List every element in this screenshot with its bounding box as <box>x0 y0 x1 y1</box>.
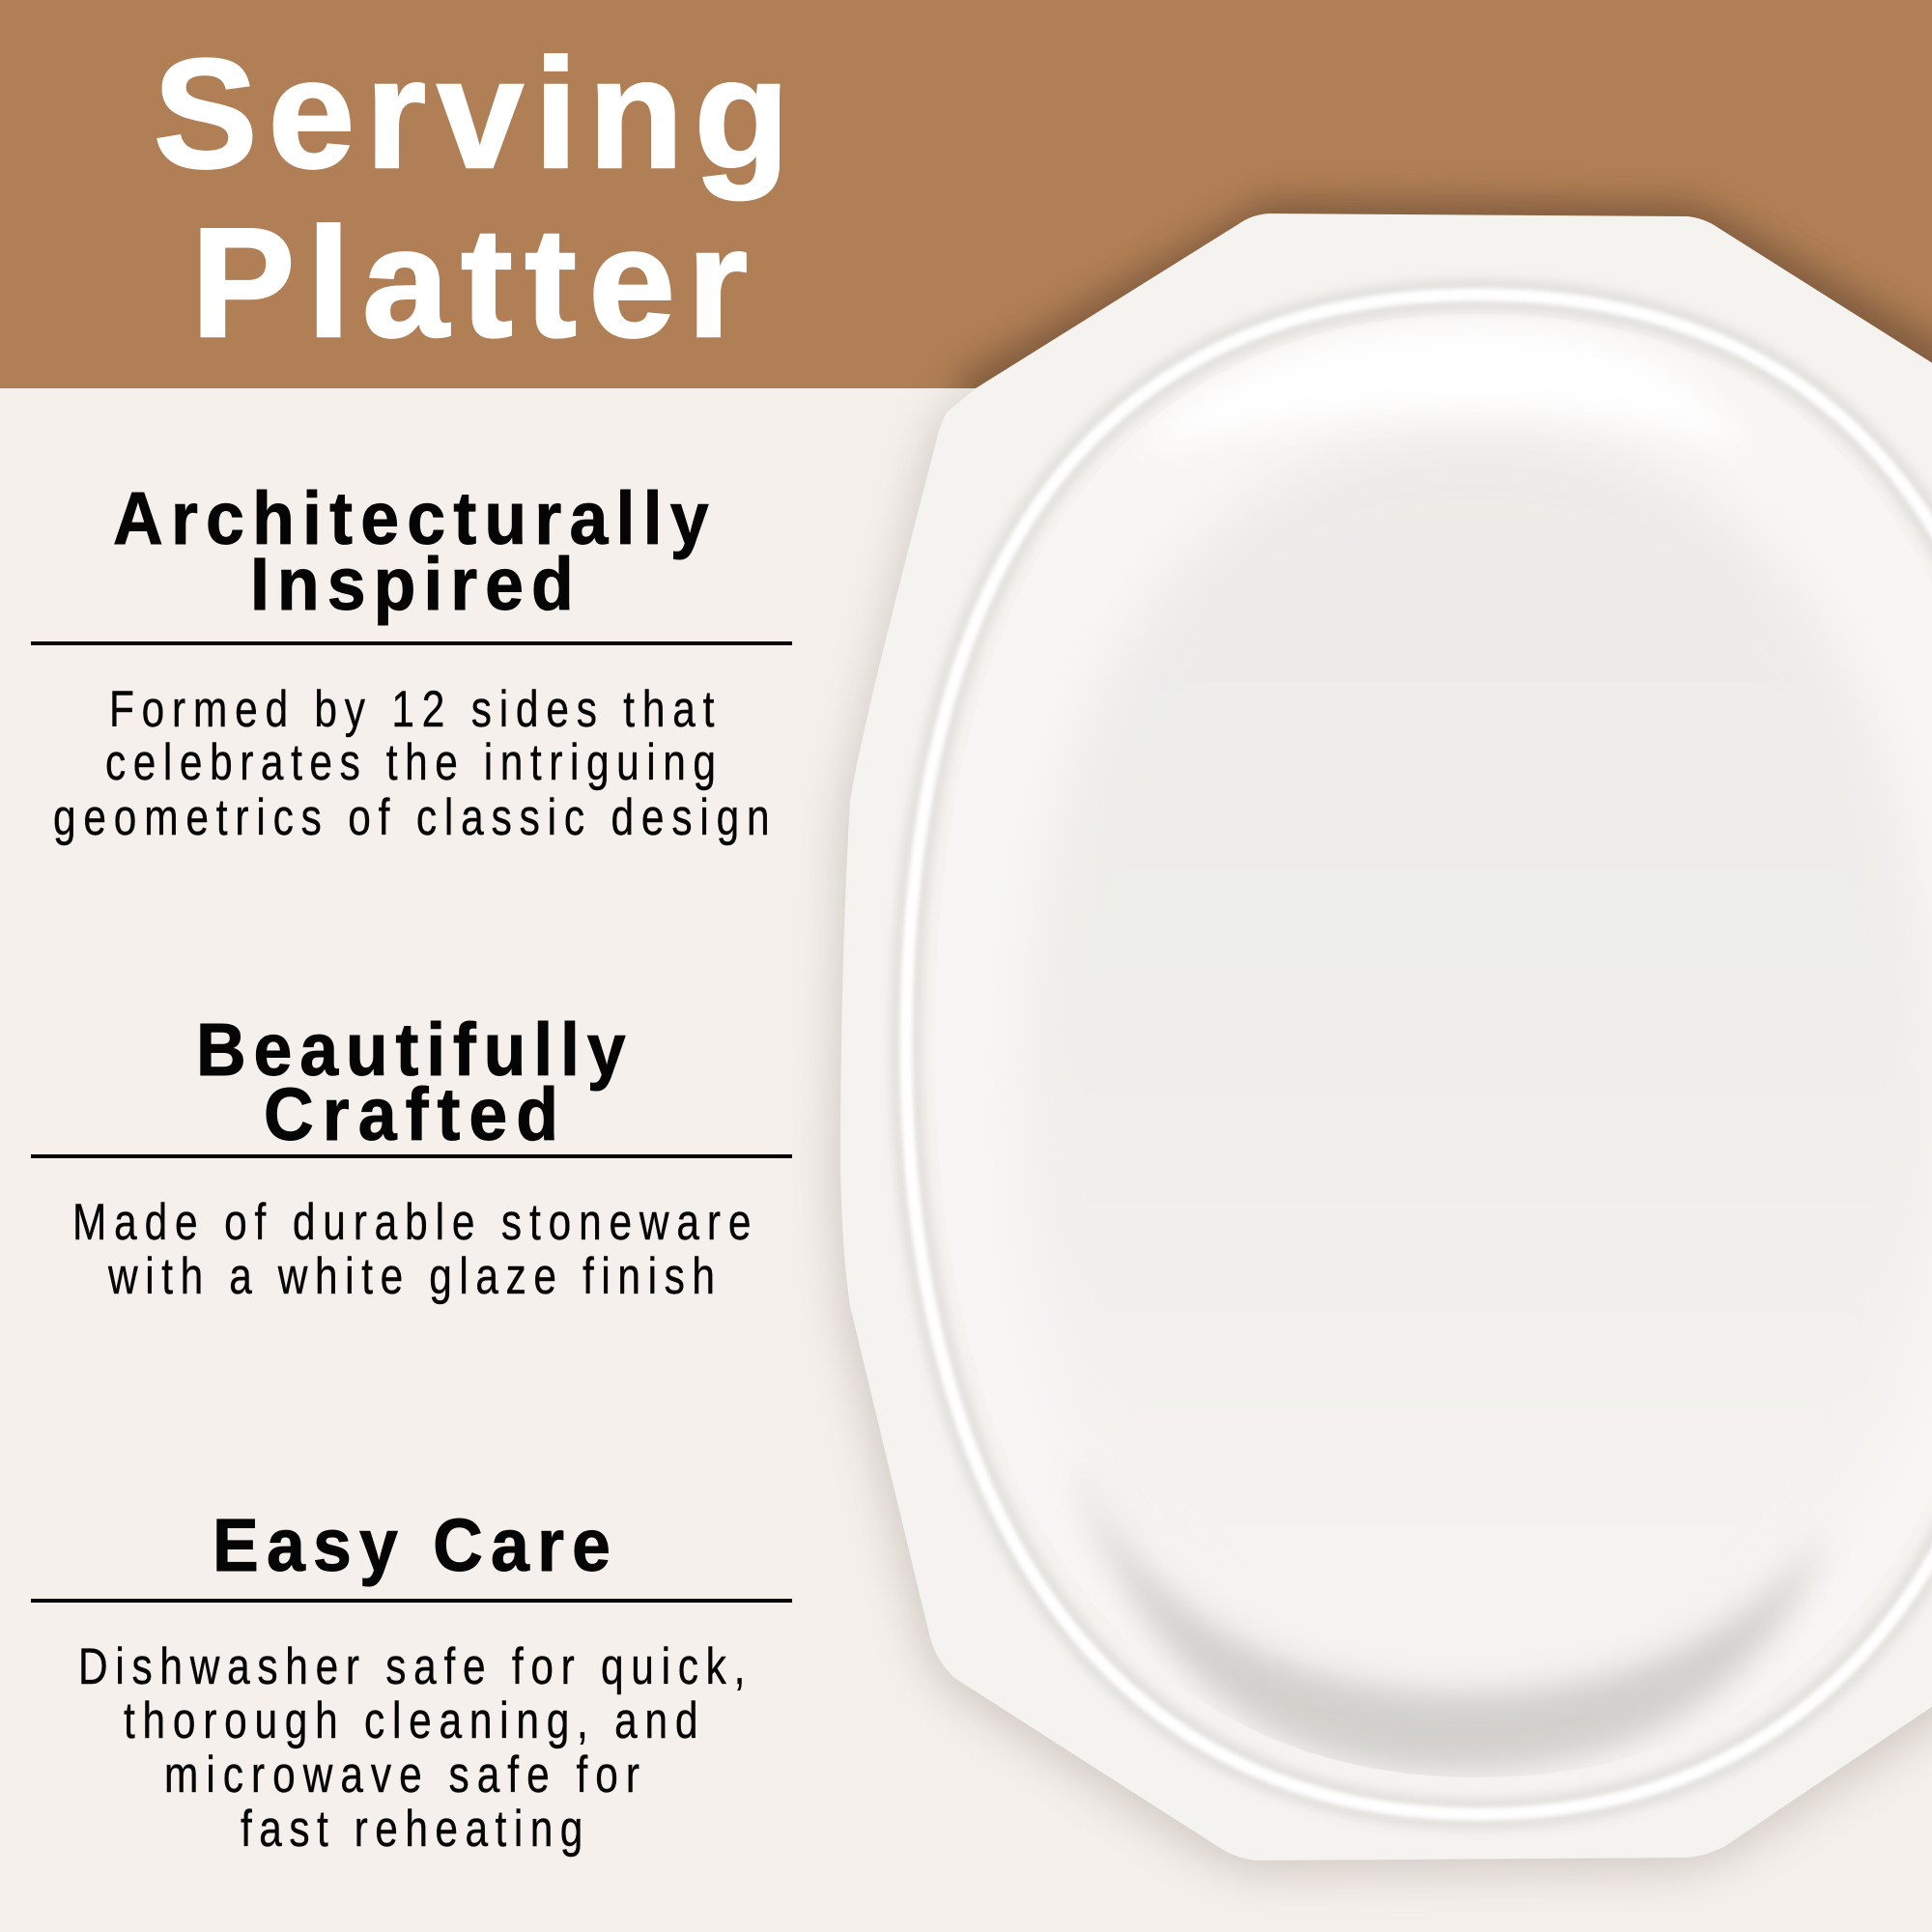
bottom bowl shadow <box>1088 1504 1818 1777</box>
body text: thorough cleaning, and <box>124 1693 697 1749</box>
body text: celebrates the intriguing <box>105 735 716 791</box>
panel: architecturally inspired <box>31 477 792 846</box>
body text <box>53 682 770 846</box>
platter outer rim <box>840 213 1932 1861</box>
title line: Platter: Platter <box>191 196 748 370</box>
heading: Inspired <box>250 543 574 626</box>
body text <box>72 1195 751 1305</box>
heading <box>196 1009 626 1156</box>
platter inner bowl <box>935 314 1932 1777</box>
title <box>154 27 789 370</box>
body text: microwave safe for <box>164 1747 639 1804</box>
divider <box>31 1599 792 1603</box>
heading: Easy Care <box>213 1504 611 1587</box>
body text: Made of durable stoneware <box>72 1195 751 1251</box>
body text <box>78 1639 745 1858</box>
heading: Beautifully <box>196 1009 626 1092</box>
platter bright ridge <box>906 295 1932 1814</box>
top highlight <box>1202 340 1702 425</box>
header banner <box>0 0 1932 388</box>
serving platter photo <box>840 213 1932 1861</box>
body text: Dishwasher safe for quick, <box>78 1639 745 1695</box>
bowl shading <box>1024 328 1932 1773</box>
panel: easy care <box>31 1504 792 1858</box>
platter shadow on banner <box>951 187 1932 388</box>
heading: Architecturally <box>113 477 709 560</box>
body text: fast reheating <box>241 1802 582 1858</box>
divider <box>31 1154 792 1158</box>
body text: Formed by 12 sides that <box>109 682 714 738</box>
body text: with a white glaze finish <box>107 1249 715 1305</box>
body text: geometrics of classic design <box>53 790 770 846</box>
platter groove halo <box>906 295 1932 1814</box>
heading <box>113 477 709 626</box>
platter drop shadow <box>837 223 1932 1870</box>
divider <box>31 641 792 645</box>
title line: Serving: Serving <box>154 27 789 201</box>
flat well of the bowl <box>1061 452 1901 1093</box>
panel: beautifully crafted <box>31 1009 792 1305</box>
heading: Crafted <box>264 1073 558 1156</box>
